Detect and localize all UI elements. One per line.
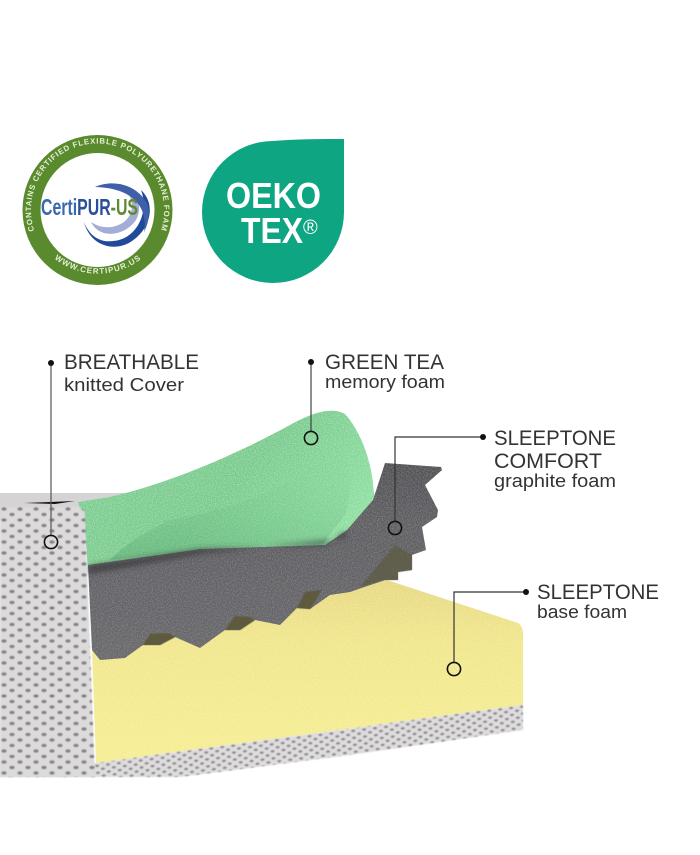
label: base foam: base foam <box>537 601 627 622</box>
callout: green tea memory foam <box>304 351 445 445</box>
green tea memory foam <box>78 411 375 570</box>
registered mark: ® <box>303 217 318 239</box>
callout: sleeptone comfort graphite foam <box>388 427 616 535</box>
seal wordmark: CertiPUR-US <box>41 194 138 220</box>
label: breathable: BREATHABLE <box>64 351 199 374</box>
seal ring text: website: WWW.CERTIPUR.US <box>55 254 140 274</box>
label: graphite foam: graphite foam <box>494 470 616 491</box>
callout: breathable knitted cover <box>44 351 199 549</box>
label: green tea: GREEN TEA <box>325 351 444 374</box>
logo: OEKO-TEX leaf <box>202 139 344 283</box>
seal ring text: top: CONTAINS CERTIFIED FLEXIBLE POLYURETHANE FOAM <box>26 138 170 232</box>
label: memory foam: memory foam <box>325 371 445 392</box>
label: comfort: COMFORT <box>494 450 602 473</box>
cover back edge <box>0 493 150 520</box>
dark shadow under green <box>88 530 347 574</box>
OEKO word: OEKO <box>226 175 321 216</box>
TEX word: TEX <box>241 210 303 251</box>
graphite foam olive shadows <box>143 545 412 645</box>
cover front panel <box>0 507 95 777</box>
green foam shaded front <box>110 440 350 560</box>
graphite comfort foam <box>88 463 442 660</box>
callout: sleeptone base foam <box>447 581 659 676</box>
logo: CertiPUR-US seal <box>22 135 172 285</box>
label: knitted cover: knitted Cover <box>64 374 184 395</box>
cover bottom strip <box>0 705 523 777</box>
opening shadow <box>24 501 75 504</box>
label: sleeptone: SLEEPTONE <box>537 581 659 604</box>
base foam: yellow <box>92 580 523 763</box>
mattress cross-section <box>0 411 523 777</box>
label: sleeptone: SLEEPTONE <box>494 427 616 450</box>
seal swirl <box>84 183 150 247</box>
